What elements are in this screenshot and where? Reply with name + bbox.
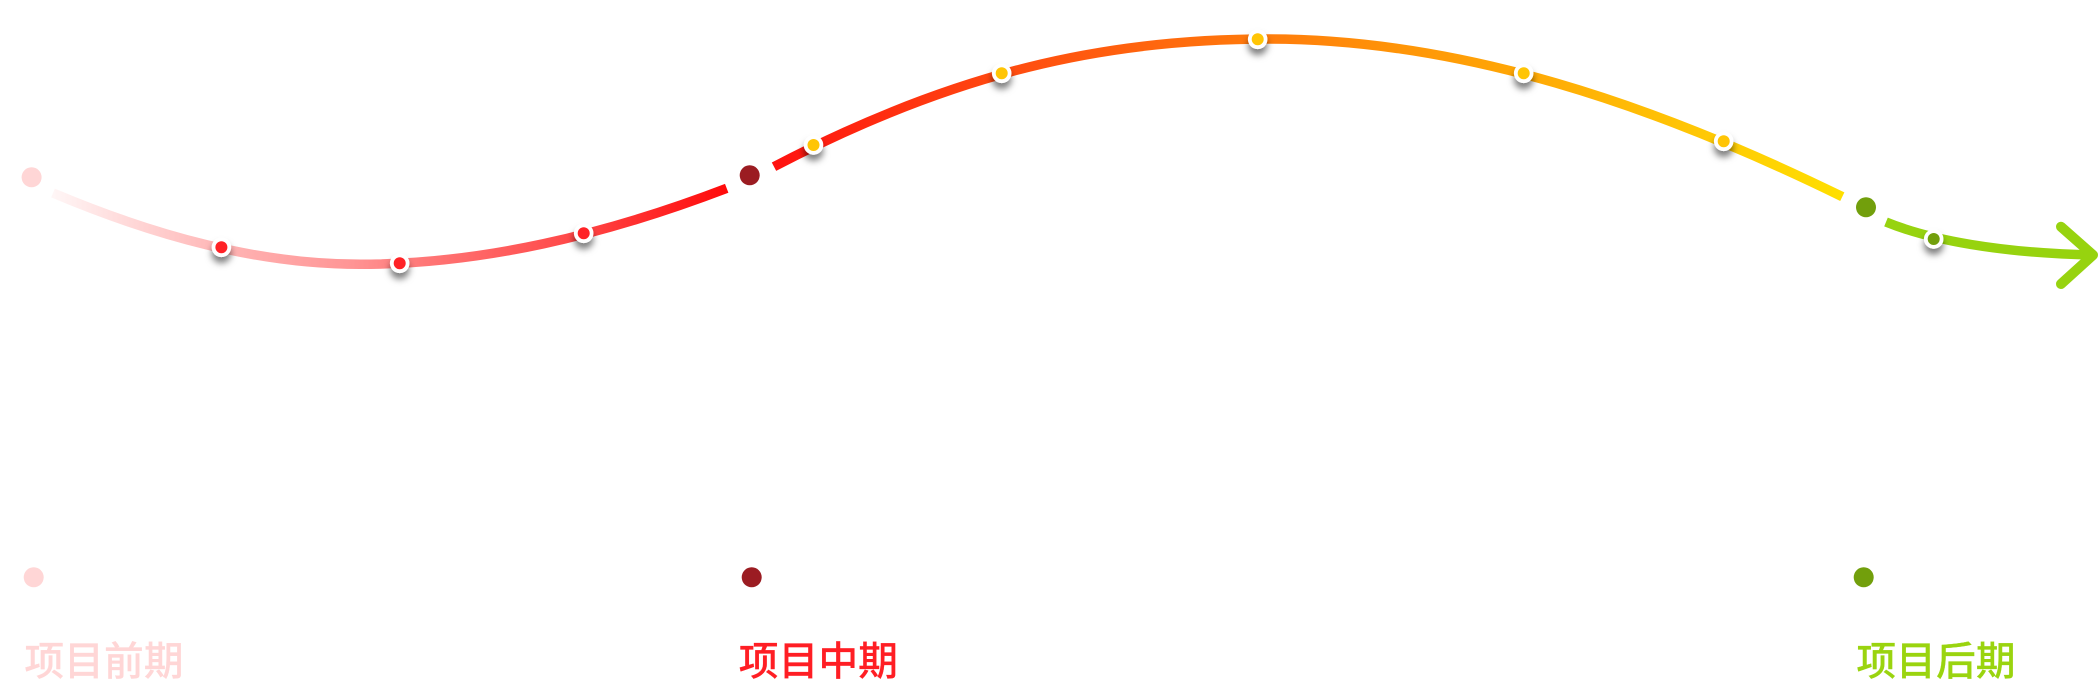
arrow head [2061,227,2093,284]
legend dot: middle [742,567,762,587]
curve: late stage line [1886,222,2093,255]
legend dot: late [1854,567,1874,587]
stage dot on curve: late [1856,197,1876,217]
stage dot on curve: middle [740,165,760,185]
marker 9 [1924,229,1943,249]
label: early stage: 项目前期 [24,640,184,684]
marker 1 [212,238,231,257]
legend dot: early [24,567,44,587]
marker 6 [1248,30,1267,49]
marker 5 [992,64,1012,83]
marker 3 [574,224,594,243]
label: late stage: 项目后期 [1856,640,2016,684]
marker 2 [390,253,410,273]
marker 7 [1514,64,1533,83]
marker 8 [1714,132,1733,151]
curve: early stage line [53,188,727,264]
curve: middle stage line [774,39,1842,197]
marker 4 [804,135,823,155]
stage dot on curve: early [22,167,42,187]
label: middle stage: 项目中期 [739,640,898,684]
